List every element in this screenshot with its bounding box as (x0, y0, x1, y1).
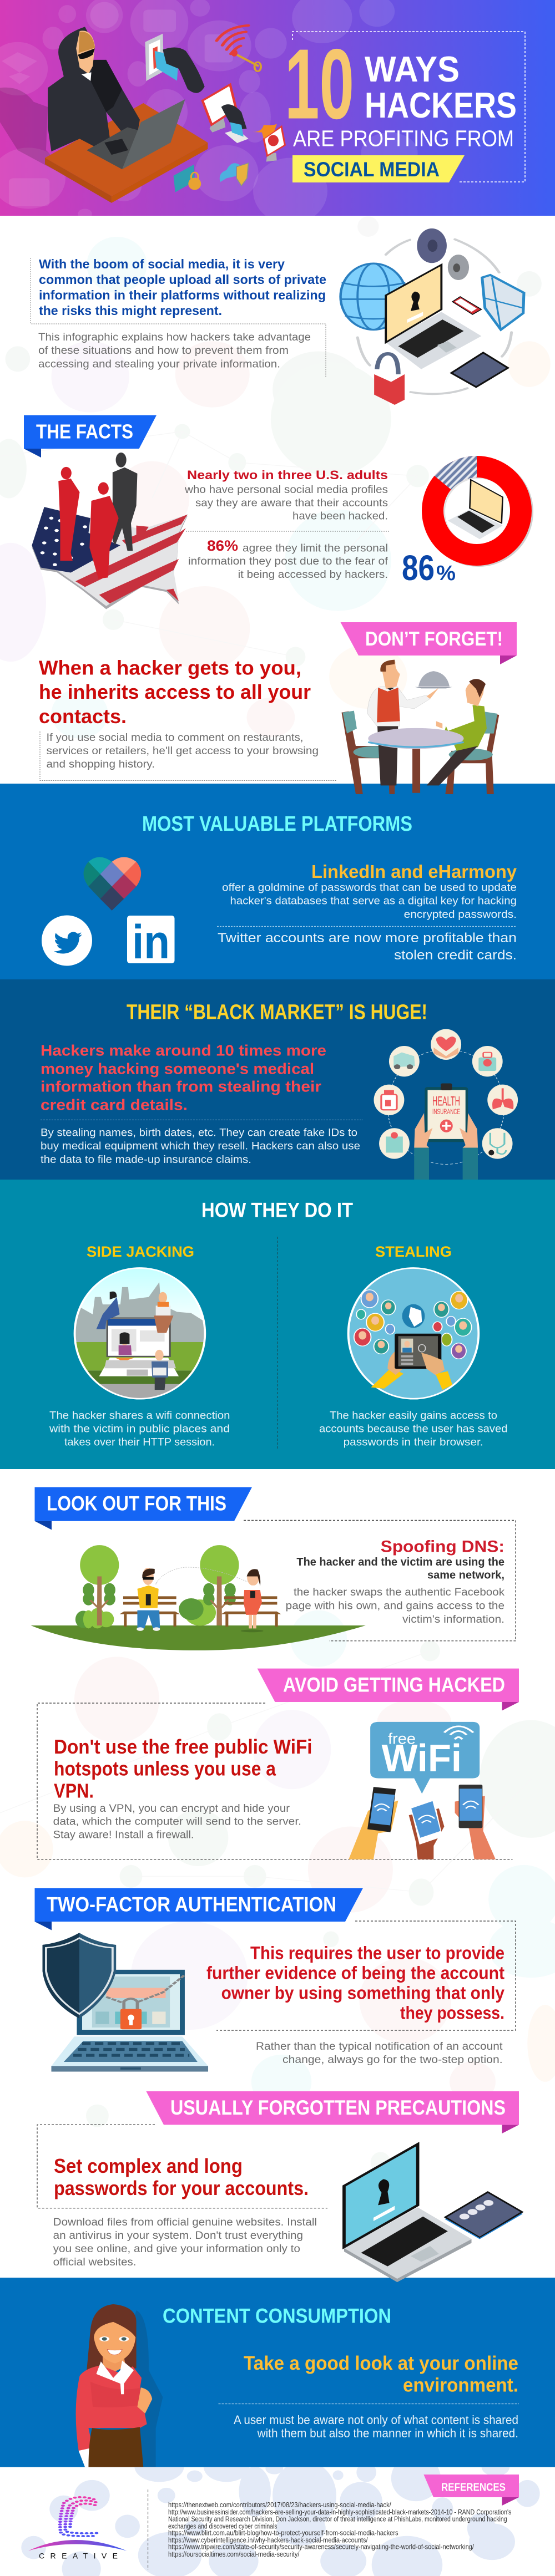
icon: linkedin: in (132, 916, 170, 969)
black market text: money hacking someone's medical (41, 1060, 314, 1077)
wifi advice text: data, which the computer will send to the server. (53, 1816, 301, 1828)
black market text: buy medical equipment which they resell. Hackers can also use (41, 1141, 360, 1152)
content consumption text: environment. (403, 2375, 518, 2396)
spoofing text: victim's information. (402, 1614, 504, 1625)
logo: creative (28, 2497, 127, 2560)
hacker contacts text (39, 656, 336, 781)
section banner: avoid getting hacked (258, 1669, 519, 1710)
title: SOCIAL MEDIA (304, 158, 440, 181)
icon: monitor with stolen card (203, 84, 249, 143)
chart: 86 percent donut: % (436, 562, 456, 585)
icon: health insurance ring: HEALTH (432, 1094, 460, 1109)
section banner: look out for this (34, 1487, 252, 1530)
divider: footer (148, 2489, 149, 2570)
intro lead text: common that people upload all sorts of private (39, 272, 326, 287)
icon: laptop with keyhole and tablet (344, 2144, 522, 2282)
title: 10 (285, 29, 354, 140)
title: ARE PROFITING FROM (293, 125, 514, 151)
icon: wifi and key (216, 26, 261, 72)
section banner: look out for this: LOOK OUT FOR THIS (47, 1492, 226, 1515)
section banner: avoid getting hacked: AVOID GETTING HACKED (283, 1674, 505, 1696)
platforms text: stolen credit cards. (394, 948, 517, 963)
two-factor text: change, always go for the two-step option. (282, 2054, 503, 2066)
stealing text: The hacker easily gains access to (330, 1410, 497, 1421)
platforms text: encrypted passwords. (404, 909, 517, 921)
icon: people on a giant laptop (73, 1267, 209, 1401)
intro lead text: With the boom of social media, it is very (39, 257, 285, 271)
references list: https://www.tripwire.com/state-of-security/security-awareness/securely-navigating-the-world-of-social-networking/ (168, 2543, 474, 2551)
side jacking text: The hacker shares a wifi connection (49, 1410, 230, 1421)
facts text: it being accessed by hackers. (238, 569, 388, 581)
intro body text: This infographic explains how hackers take advantage (38, 332, 311, 343)
faint background pattern: upper white area (0, 216, 555, 784)
icon: eHarmony heart (84, 857, 141, 911)
platforms text: Twitter accounts are now more profitable than (218, 931, 517, 946)
stealing text: accounts because the user has saved (319, 1423, 507, 1435)
panel: side jacking (49, 1243, 230, 1449)
content consumption text (219, 2353, 519, 2440)
side jacking text: with the victim in public places and (49, 1423, 230, 1435)
facts text: say they are aware that their accounts (195, 497, 388, 509)
chart: 86 percent donut (402, 456, 523, 588)
spoofing text: Spoofing DNS: (381, 1538, 504, 1556)
wifi advice text: hotspots unless you use a (54, 1757, 276, 1780)
section banner: the facts: THE FACTS (36, 420, 133, 443)
black market text (41, 1041, 363, 1166)
dashed frame around title (292, 32, 525, 182)
section banner: the facts (24, 415, 157, 458)
two-factor text: they possess. (400, 2003, 504, 2023)
icon: free wifi bubble and phones (349, 1722, 496, 1859)
hacker contacts text: contacts. (39, 705, 127, 728)
intro lead text: the risks this might represent. (39, 303, 222, 318)
icon: health insurance ring (374, 1029, 518, 1180)
intro body text (38, 332, 311, 370)
content consumption text: A user must be aware not only of what content is shared (234, 2413, 518, 2427)
dashed frame: spoofing (244, 1520, 516, 1641)
facts text: have been hacked. (292, 510, 388, 522)
passwords text: an antivirus in your system. Don't trust everything (53, 2230, 303, 2242)
wifi advice text (53, 1735, 312, 1841)
black market text: the data to file made-up insurance claims. (41, 1154, 251, 1166)
intro lead text (31, 257, 326, 377)
wifi advice text: Stay aware! Install a firewall. (53, 1830, 194, 1841)
two-factor text: further evidence of being the account (206, 1963, 504, 1983)
hacker contacts text: If you use social media to comment on restaurants, (47, 732, 303, 744)
column divider (277, 1237, 278, 1449)
heading: side jacking: SIDE JACKING (87, 1243, 194, 1260)
panel: most valuable platforms background (0, 784, 555, 979)
wifi advice text: By using a VPN, you can encrypt and hide your (53, 1803, 290, 1815)
hacker contacts text: and shopping history. (47, 759, 155, 770)
heading: how they do it: HOW THEY DO IT (201, 1199, 353, 1221)
icon: card with padlock (174, 165, 201, 192)
passwords text: passwords for your accounts. (54, 2177, 309, 2199)
icon: avatars and tablet (349, 1268, 478, 1399)
passwords text: Download files from official genuine websites. Install (53, 2217, 317, 2228)
content consumption text: with them but also the manner in which it is shared. (257, 2426, 518, 2440)
dashed frame: two-factor (216, 1921, 516, 2030)
two-factor text (206, 1943, 504, 2066)
heading: content consumption: CONTENT CONSUMPTION (163, 2305, 391, 2328)
title: WAYS (365, 49, 460, 89)
spoofing text (286, 1538, 505, 1625)
two-factor text: This requires the user to provide (250, 1943, 504, 1963)
stealing text: passwords in their browser. (344, 1437, 483, 1449)
panel: content consumption background (0, 2278, 555, 2467)
spoofing text: The hacker and the victim are using the (296, 1556, 504, 1568)
logo: creative: CREATIVE (39, 2551, 118, 2560)
platforms text: offer a goldmine of passwords that can be used to update (222, 882, 517, 894)
section banner: references: REFERENCES (441, 2482, 506, 2494)
section banner: two-factor authentication: TWO-FACTOR AUTHENTICATION (47, 1893, 336, 1916)
panel: how they do it background (0, 1180, 555, 1469)
black market text: By stealing names, birth dates, etc. They can create fake IDs to (41, 1127, 357, 1139)
section banner: don't forget (341, 622, 517, 664)
references list (168, 2501, 511, 2558)
platforms text (217, 861, 517, 963)
stealing text (319, 1410, 507, 1449)
facts text: 86% (207, 537, 238, 554)
panel: black market background (0, 979, 555, 1180)
panel: stealing (319, 1243, 507, 1449)
icon: woman presenter (76, 2304, 163, 2467)
two-factor text: Rather than the typical notification of an account (256, 2041, 503, 2052)
heading: stealing: STEALING (375, 1243, 452, 1260)
passwords text (53, 2155, 317, 2268)
facts text: Nearly two in three U.S. adults (187, 468, 388, 482)
icon: shield and locked laptop (43, 1933, 208, 2072)
intro lead text: information in their platforms without realizing (39, 288, 326, 302)
intro body text: accessing and stealing your private information. (38, 358, 280, 370)
icon: twitter (42, 915, 92, 966)
spoofing text: the hacker swaps the authentic Facebook (294, 1587, 505, 1598)
icon: free wifi bubble and phones: free (388, 1730, 416, 1747)
title (285, 29, 517, 182)
icon: cloud and shield (220, 163, 249, 186)
icon: burning skull sign (252, 124, 285, 162)
title: HACKERS (365, 85, 517, 125)
facts text: who have personal social media profiles (184, 484, 388, 496)
icon: hacker at laptop (0, 27, 208, 203)
wifi advice text: VPN. (54, 1780, 94, 1802)
icon: park scene with benches (31, 1545, 366, 1650)
header background (0, 0, 555, 224)
facts text (184, 468, 389, 581)
hacker contacts text: services or retailers, he'll get access to your browsing (47, 745, 319, 757)
black market text: information than from stealing their (41, 1078, 321, 1095)
heading: most valuable platforms: MOST VALUABLE PLATFORMS (142, 812, 412, 836)
side jacking text (49, 1410, 230, 1449)
intro body text: of these situations and how to prevent them from (38, 345, 289, 357)
wifi advice text: Don't use the free public WiFi (54, 1735, 312, 1758)
dashed frame: passwords (37, 2125, 327, 2208)
icon: flag map with business figures (32, 453, 188, 609)
section banner: two-factor authentication (34, 1888, 363, 1930)
chart: 86 percent donut: 86 (402, 548, 435, 588)
facts text: agree they limit the personal (243, 542, 388, 555)
references list: https://www.blirt.com.au/blirt-blog/how-to-protect-yourself-from-social-media-hackers (168, 2529, 398, 2537)
hacker contacts text: he inherits access to all your (39, 680, 311, 703)
icon: health insurance ring: INSURANCE (432, 1107, 460, 1116)
section banner: references (423, 2475, 519, 2506)
spoofing text: same network, (427, 1569, 504, 1582)
passwords text: official websites. (53, 2257, 137, 2268)
references list: https://www.cyberintelligence.in/why-hackers-hack-social-media-accounts/ (168, 2536, 368, 2544)
passwords text: you see online, and give your information only to (53, 2243, 300, 2255)
footer background icons (0, 2467, 555, 2576)
faint background pattern: lower white area (0, 1469, 555, 2278)
references list: exchanges and discovered cyber criminals (168, 2522, 278, 2530)
facts text: information they post due to the fear of (188, 556, 389, 567)
section banner: usually forgotten precautions (146, 2091, 519, 2133)
references list: https://oursocialtimes.com/social-media-security/ (168, 2550, 300, 2558)
content consumption text: Take a good look at your online (244, 2353, 518, 2374)
side jacking text: takes over their HTTP session. (64, 1437, 215, 1449)
icon: security laptop cluster (341, 228, 524, 405)
passwords text: Set complex and long (54, 2155, 243, 2177)
icon: waiter serving a customer (341, 660, 499, 794)
platforms text: LinkedIn and eHarmony (311, 861, 517, 882)
references list: https://thenextweb.com/contributors/2017/08/23/hackers-using-social-media-hack/ (168, 2501, 391, 2509)
spoofing text: page with his own, and gains access to the (286, 1601, 504, 1612)
platforms text: hacker's databases that serve as a digital key for hacking (230, 896, 517, 907)
hacker contacts text: When a hacker gets to you, (39, 656, 301, 679)
section banner: usually forgotten precautions: USUALLY FORGOTTEN PRECAUTIONS (170, 2096, 506, 2119)
heading: black market: THEIR “BLACK MARKET” IS HUGE! (127, 1000, 427, 1024)
black market text: credit card details. (41, 1096, 188, 1114)
section banner: don't forget: DON’T FORGET! (365, 627, 503, 650)
dashed frame: wifi (37, 1703, 513, 1859)
icon: free wifi bubble and phones: WiFi (382, 1736, 462, 1780)
two-factor text: owner by using something that only (221, 1983, 504, 2003)
black market text: Hackers make around 10 times more (41, 1041, 326, 1059)
icon: phone and stolen card (145, 34, 205, 93)
